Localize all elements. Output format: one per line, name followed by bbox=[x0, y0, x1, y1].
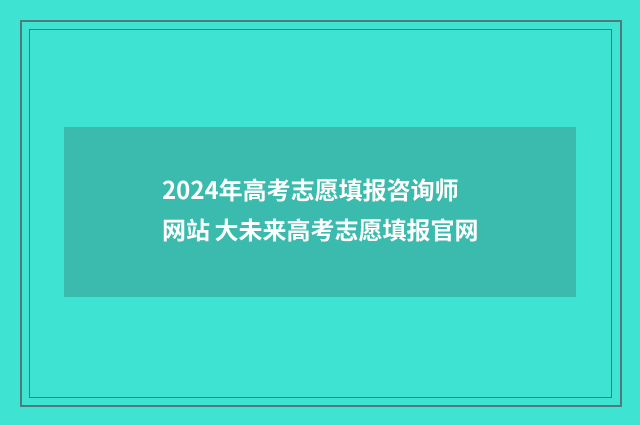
panel: title band bbox=[64, 127, 576, 297]
title text bbox=[162, 171, 478, 246]
title line 1: 2024年高考志愿填报咨询师 bbox=[162, 171, 459, 206]
title line 2: 网站 大未来高考志愿填报官网 bbox=[162, 211, 478, 246]
inner frame bbox=[29, 29, 612, 398]
